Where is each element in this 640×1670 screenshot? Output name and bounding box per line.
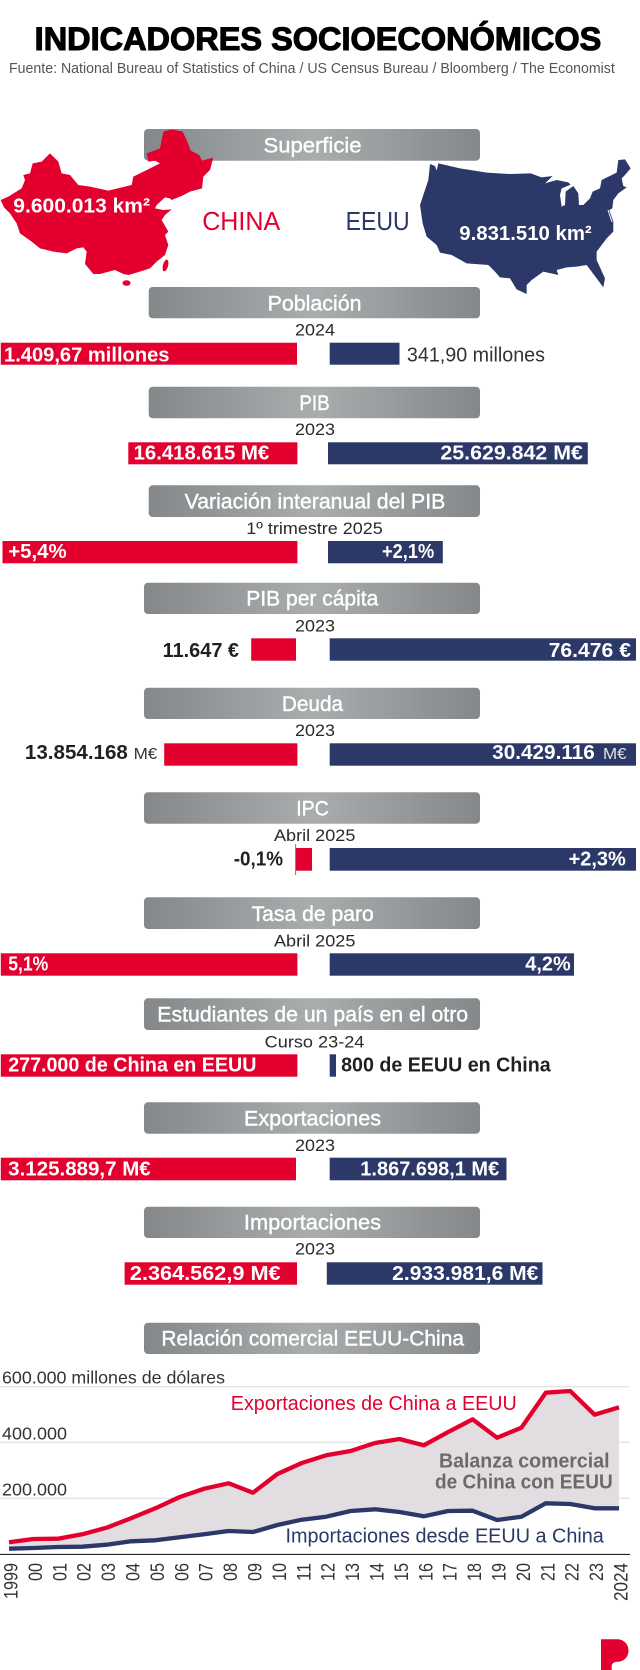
label: imports: Importaciones desde EEUU a China [286, 1525, 605, 1547]
x axis labels: 18 [465, 1563, 486, 1581]
bar: China: 5,1% [8, 953, 48, 976]
x axis labels: 21 [538, 1563, 559, 1581]
heading: IPC [296, 798, 329, 821]
x axis labels: 02 [75, 1563, 96, 1581]
bar: China: M€ [134, 746, 157, 763]
panel: exportaciones [1, 1102, 507, 1180]
period: Curso 23-24 [265, 1032, 364, 1051]
bar: China [25, 741, 297, 766]
bar: EEUU [330, 953, 574, 976]
x axis labels: 2024 [612, 1563, 632, 1601]
label: USA area: 9.831.510 km² [459, 222, 592, 245]
x axis labels: 03 [99, 1563, 120, 1581]
x axis labels: 1999 [2, 1563, 22, 1599]
panel: superficie [1, 129, 631, 294]
bar: EEUU: M€ [603, 746, 627, 763]
heading: PIB per cápita [246, 588, 379, 611]
x axis labels: 08 [221, 1563, 242, 1581]
source line: Fuente: National Bureau of Statistics of China / US Census Bureau / Bloomberg / The Economist [9, 61, 615, 77]
panel: deuda [25, 688, 636, 766]
bar: China: 16.418.615 M€ [134, 442, 270, 465]
label: China area: 9.600.013 km² [13, 194, 150, 217]
label: trade balance: Balanza comercial [439, 1450, 610, 1472]
heading [144, 998, 480, 1030]
x axis labels: 10 [270, 1563, 291, 1581]
heading: PIB [299, 392, 330, 415]
heading [149, 287, 480, 318]
bar: EEUU [330, 638, 636, 662]
x axis labels: 09 [246, 1563, 266, 1581]
x axis labels: 22 [563, 1563, 584, 1581]
bar: China [163, 638, 296, 662]
x axis labels: 06 [172, 1563, 193, 1581]
year: 2023 [295, 721, 335, 740]
panel: PIB [128, 387, 588, 465]
heading [149, 485, 480, 517]
map: China [1, 129, 213, 286]
period: Abril 2025 [274, 826, 355, 845]
heading [144, 583, 480, 614]
map: USA [420, 159, 631, 294]
heading [144, 897, 480, 929]
heading [144, 1207, 480, 1238]
x axis labels: 05 [148, 1563, 169, 1581]
heading [149, 387, 480, 418]
bar: EEUU [328, 442, 588, 465]
year: 2023 [295, 1136, 335, 1155]
bar: EEUU [330, 741, 636, 766]
x axis labels: 14 [368, 1563, 388, 1581]
bar: China: 3.125.889,7 M€ [8, 1157, 151, 1180]
bar: China: 277.000 de China en EEUU [8, 1053, 257, 1076]
x axis labels: 01 [50, 1563, 71, 1581]
heading [144, 792, 480, 824]
bar: EEUU [330, 343, 545, 366]
bar: China: 2.364.562,9 M€ [130, 1262, 281, 1285]
heading: Variación interanual del PIB [185, 491, 445, 514]
panel: importaciones [125, 1207, 542, 1285]
x axis labels: 20 [514, 1563, 535, 1581]
bar: EEUU: +2,1% [382, 540, 434, 563]
label: EEUU: EEUU [346, 208, 410, 236]
bar: EEUU: 800 de EEUU en China [341, 1053, 551, 1076]
bar: China [234, 844, 312, 875]
bar: China: 11.647 € [163, 639, 240, 662]
year: 2023 [295, 616, 335, 635]
bar: EEUU: 30.429.116 [492, 741, 595, 764]
bar: EEUU [328, 540, 443, 563]
heading: Población [268, 293, 362, 316]
bar: China [1, 343, 297, 366]
heading [144, 688, 480, 719]
y axis labels: 200.000 [2, 1479, 67, 1499]
x axis labels: 13 [343, 1563, 364, 1581]
x axis labels: 16 [416, 1563, 437, 1581]
panel: relación comercial [0, 1323, 632, 1601]
line: exports [9, 1391, 619, 1542]
x axis labels: 19 [490, 1563, 510, 1581]
x axis labels: 11 [294, 1563, 315, 1581]
panel: tasa de paro [1, 897, 574, 976]
heading [144, 1323, 480, 1354]
x axis labels: 00 [26, 1563, 47, 1581]
bar: China [2, 540, 297, 563]
x axis labels: 17 [441, 1563, 462, 1581]
heading: Deuda [282, 693, 343, 716]
bar: EEUU [327, 1262, 542, 1285]
panel: IPC [144, 792, 636, 875]
logo [601, 1639, 628, 1670]
y axis labels [2, 1367, 225, 1499]
year: 2023 [295, 420, 335, 439]
y axis labels: 600.000 millones de dólares [2, 1367, 225, 1387]
panel: variación interanual [2, 485, 480, 563]
line: imports [9, 1503, 619, 1549]
bar: EEUU: 2.933.981,6 M€ [392, 1262, 539, 1285]
line chart [0, 1367, 632, 1601]
bar: EEUU [330, 847, 636, 871]
bar: China: 1.409,67 millones [4, 343, 170, 366]
x axis labels: 04 [124, 1563, 144, 1581]
label: trade balance [435, 1450, 613, 1494]
x axis labels: 12 [319, 1563, 340, 1581]
bar: China [1, 1157, 296, 1180]
heading: superficie: Superficie [264, 134, 362, 157]
heading: Relación comercial EEUU-China [161, 1328, 464, 1351]
heading: Importaciones [244, 1212, 381, 1235]
period: 1º trimestre 2025 [246, 519, 383, 538]
x axis labels [2, 1563, 632, 1601]
period: Abril 2025 [274, 931, 355, 950]
label: exports: Exportaciones de China a EEUU [231, 1393, 517, 1415]
panel: estudiantes [1, 998, 551, 1077]
label: trade balance: de China con EEUU [435, 1472, 613, 1494]
bar: EEUU: 1.867.698,1 M€ [360, 1157, 500, 1180]
x axis labels: 23 [587, 1563, 608, 1581]
bar: China: -0,1% [234, 847, 283, 870]
x axis labels: 15 [392, 1563, 413, 1581]
year: 2024 [295, 321, 335, 340]
bar: China [1, 953, 297, 976]
bar: EEUU: 25.629.842 M€ [440, 442, 584, 465]
x axis labels: 07 [197, 1563, 218, 1581]
title: INDICADORES SOCIOECONÓMICOS [35, 21, 601, 57]
panel: población [1, 287, 545, 366]
heading [144, 1102, 480, 1134]
bar: EEUU: 76.476 € [549, 639, 632, 662]
bar: EEUU: 4,2% [525, 953, 571, 976]
bar: EEUU: +2,3% [569, 847, 626, 870]
panel: PIB per cápita [144, 583, 636, 662]
label: CHINA: CHINA [202, 208, 280, 236]
heading: superficie [144, 129, 480, 161]
y axis labels: 400.000 [2, 1423, 67, 1443]
heading: Tasa de paro [252, 903, 374, 926]
bar: China: +5,4% [8, 540, 67, 563]
year: 2023 [295, 1240, 335, 1259]
heading: Estudiantes de un país en el otro [157, 1004, 468, 1027]
heading: Exportaciones [244, 1108, 381, 1131]
bar: EEUU: 341,90 millones [407, 344, 545, 366]
bar: China: 13.854.168 [25, 741, 128, 764]
area: trade balance [9, 1391, 619, 1549]
